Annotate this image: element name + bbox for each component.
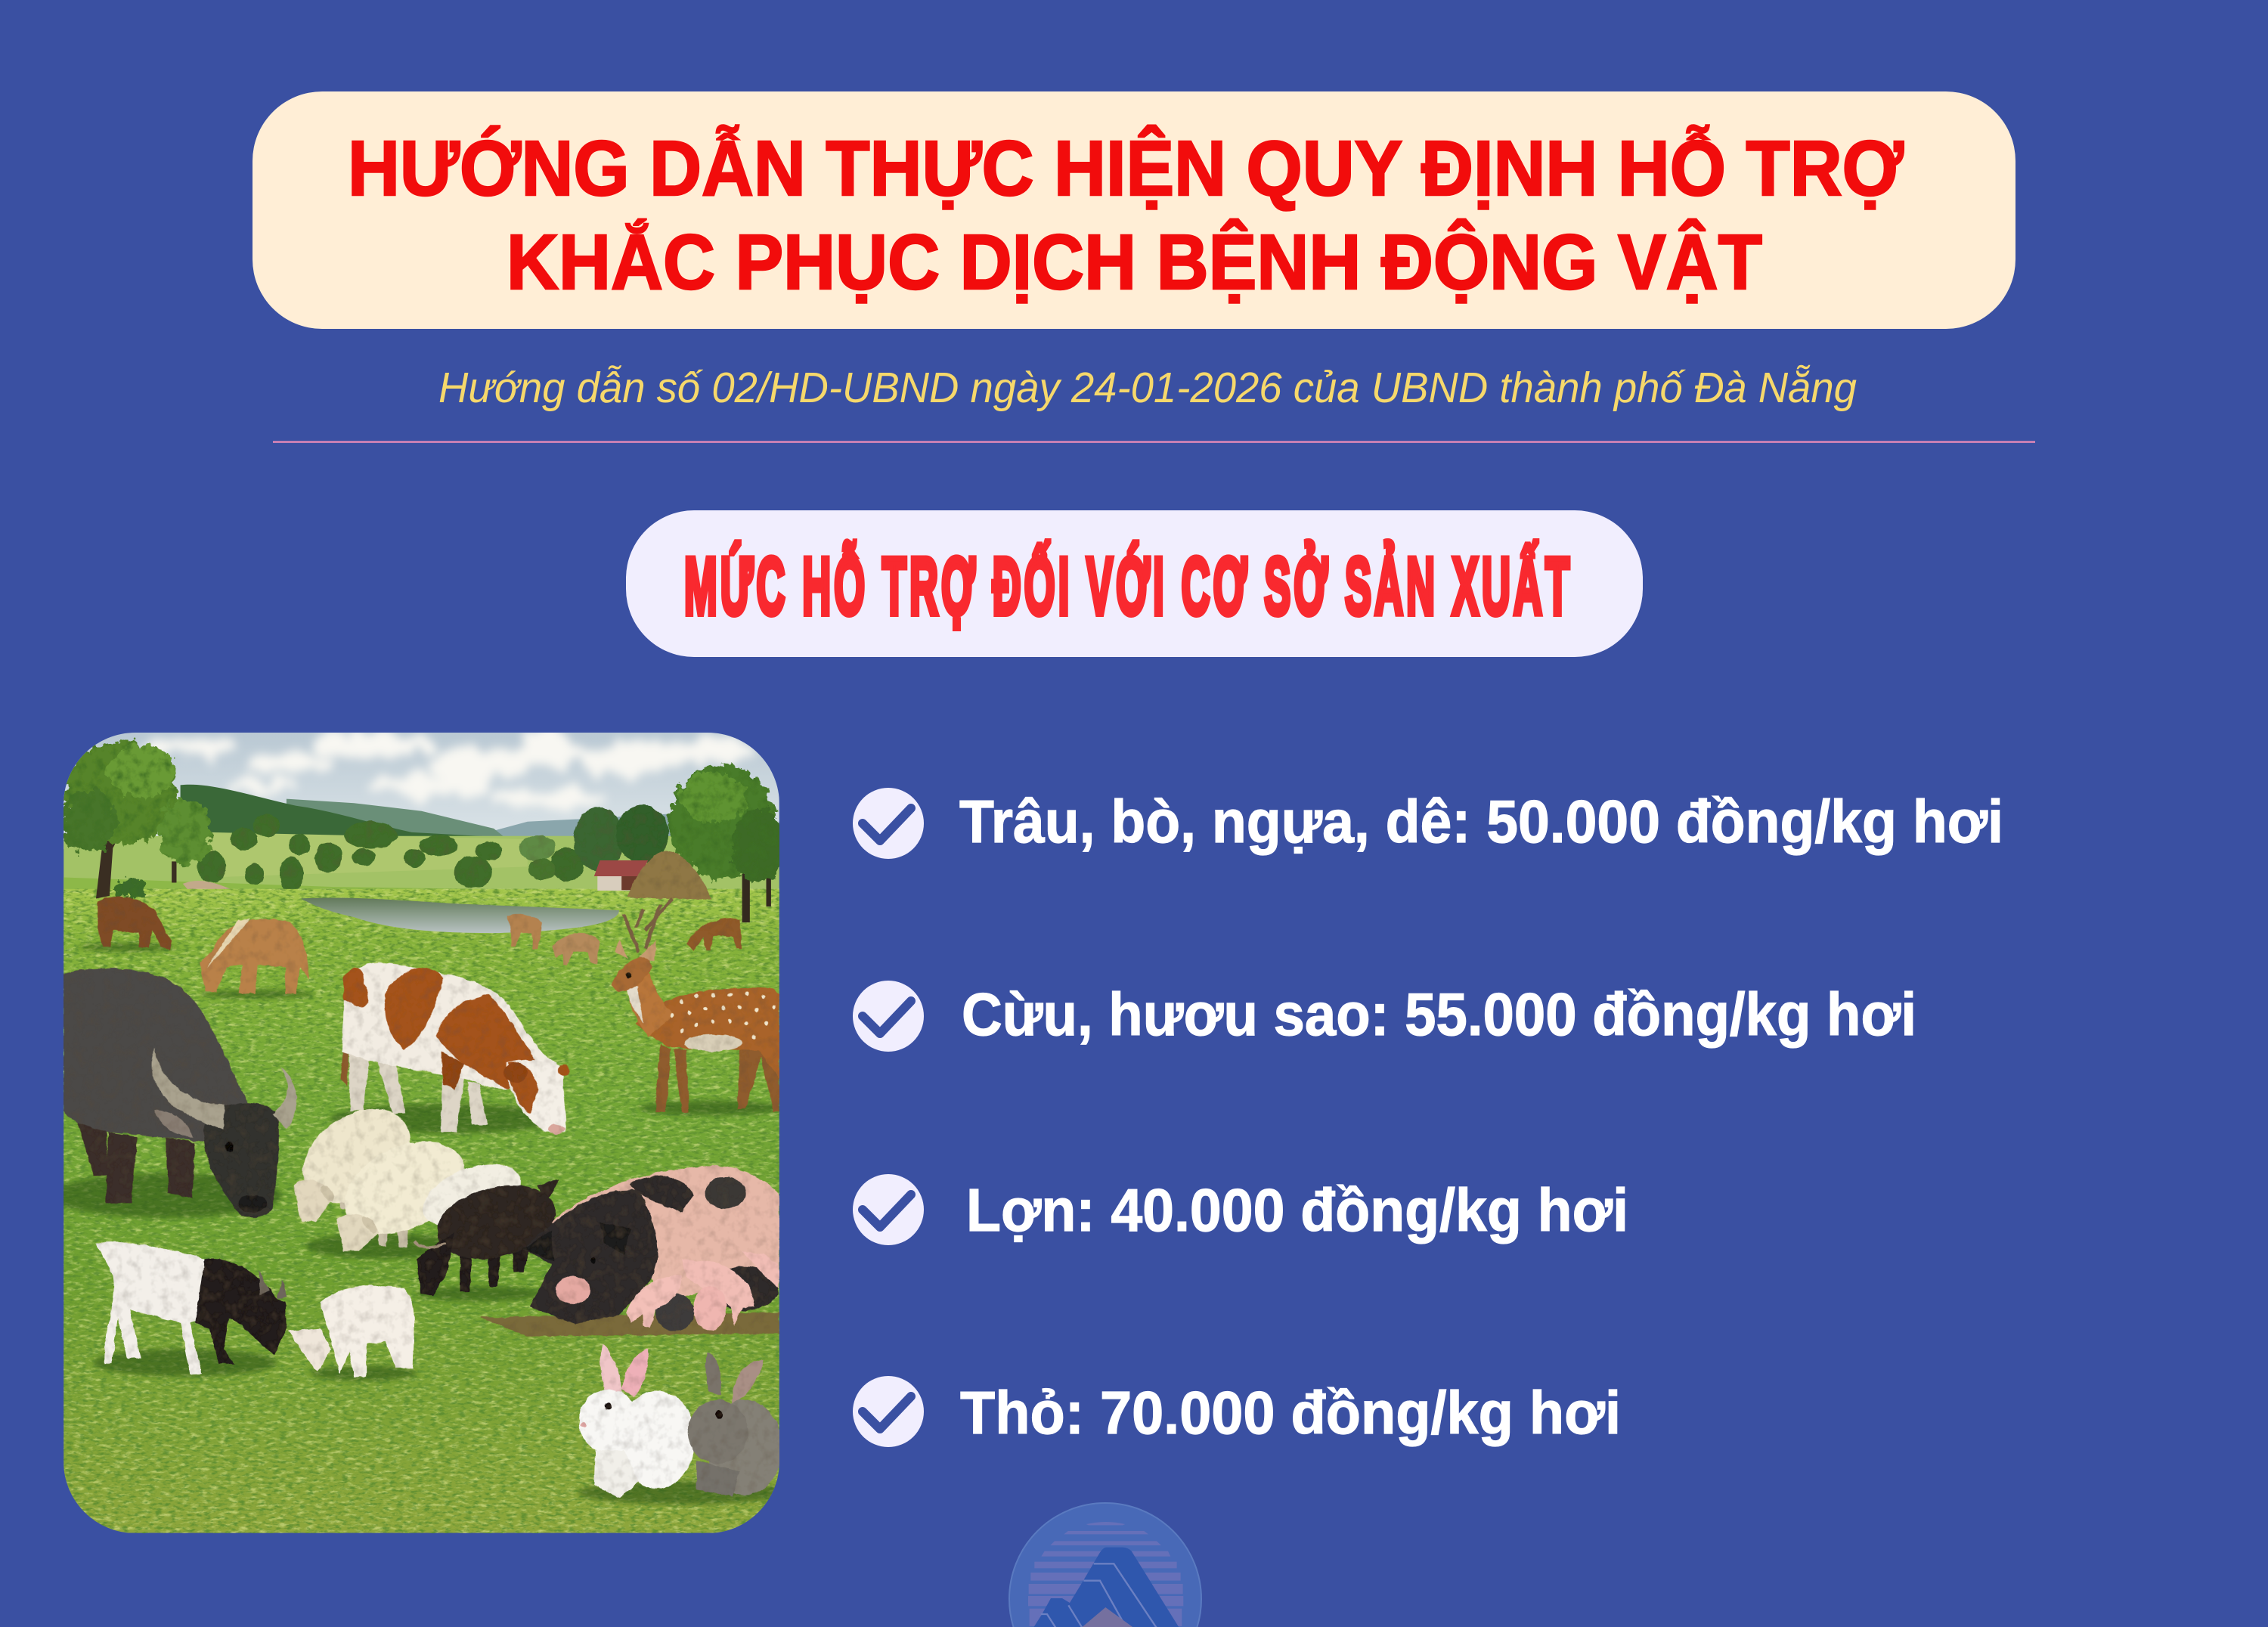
mid-distance fields bbox=[64, 804, 779, 910]
white and black goat bbox=[96, 1242, 287, 1374]
check icon 3 bbox=[853, 1174, 924, 1245]
check item 1 bbox=[853, 788, 2003, 859]
meadow bbox=[64, 889, 779, 1533]
piglets bbox=[627, 1251, 779, 1331]
distant hills bbox=[180, 785, 671, 836]
all animals bbox=[64, 897, 782, 1498]
water buffalo bbox=[64, 968, 296, 1217]
left tree bbox=[60, 740, 212, 900]
tan horse bbox=[200, 919, 309, 994]
check icon 2 bbox=[853, 981, 924, 1052]
item text 1: Trâu, bò, ngựa, dê: 50.000 đồng/kg hơi bbox=[959, 788, 2003, 855]
black goat bbox=[414, 1174, 562, 1297]
pond bbox=[301, 898, 619, 933]
clouds bbox=[137, 731, 754, 807]
title panel bbox=[253, 91, 2015, 329]
right tree bbox=[669, 764, 785, 922]
white lamb bbox=[288, 1285, 414, 1377]
white rabbit bbox=[578, 1344, 696, 1498]
farmhouse bbox=[594, 860, 648, 891]
check item 4 bbox=[853, 1376, 1621, 1447]
scattered trees bbox=[197, 804, 669, 893]
item text 2: Cừu, hươu sao: 55.000 đồng/kg hơi bbox=[962, 981, 1916, 1048]
photo: farm animals on a meadow bbox=[50, 731, 785, 1533]
brown and white cow bbox=[340, 963, 569, 1134]
item text 3: Lợn: 40.000 đồng/kg hơi bbox=[966, 1176, 1628, 1244]
grey rabbit bbox=[688, 1352, 782, 1496]
check icon 4 bbox=[853, 1376, 924, 1447]
sheep group bbox=[289, 1090, 528, 1252]
spotted deer bbox=[611, 899, 779, 1112]
watermark logo bbox=[1009, 1503, 1201, 1627]
section heading text: MỨC HỖ TRỢ ĐỐI VỚI CƠ SỞ SẢN XUẤT bbox=[684, 541, 1569, 631]
shadows bbox=[50, 943, 785, 1505]
item text 4: Thỏ: 70.000 đồng/kg hơi bbox=[960, 1379, 1621, 1446]
small brown cow bbox=[98, 897, 172, 950]
subtitle: Hướng dẫn số 02/HD-UBND ngày 24-01-2026 của UBND thành phố Đà Nẵng bbox=[438, 364, 1857, 412]
check item 3 bbox=[853, 1174, 1628, 1245]
haystack bbox=[627, 851, 711, 900]
check item 2 bbox=[853, 981, 1916, 1052]
title line 2: KHẮC PHỤC DỊCH BỆNH ĐỘNG VẬT bbox=[507, 218, 1762, 305]
section heading pill bbox=[626, 510, 1643, 657]
distant animals bbox=[506, 914, 742, 965]
sow and piglets bbox=[479, 1166, 779, 1336]
check icon 1 bbox=[853, 788, 924, 859]
title line 1: HƯỚNG DẪN THỰC HIỆN QUY ĐỊNH HỖ TRỢ bbox=[348, 124, 1904, 212]
